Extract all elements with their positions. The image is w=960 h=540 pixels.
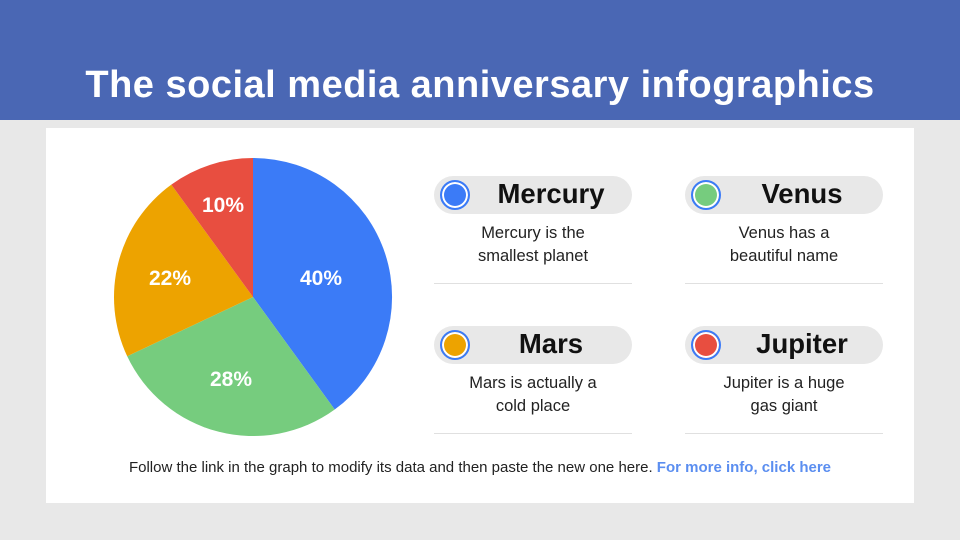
pie chart: 40% xyxy=(300,267,342,290)
legend: Mercury xyxy=(434,176,632,284)
legend: Mercury: Mercury is the xyxy=(481,224,585,242)
title: The social media anniversary infographics xyxy=(85,64,875,106)
pie chart: 22% xyxy=(149,267,191,290)
legend: Venus: beautiful name xyxy=(730,247,838,265)
legend: Venus: Venus xyxy=(761,178,842,209)
legend: Jupiter: Jupiter xyxy=(756,328,848,359)
legend: Mars: Mars is actually a xyxy=(469,374,597,392)
header bar xyxy=(0,0,960,120)
legend: Mars xyxy=(434,326,632,434)
legend: Mars: cold place xyxy=(496,397,570,415)
legend: Venus: Venus has a xyxy=(739,224,829,242)
pie chart: 10% xyxy=(202,194,244,217)
panel: content xyxy=(46,128,914,503)
legend: Jupiter: Jupiter is a huge xyxy=(723,374,845,392)
legend: Mercury: Mercury xyxy=(498,178,604,209)
footer note: Follow the link in the graph to modify its data and then paste the new one here. For more info, click here xyxy=(129,459,831,476)
legend: Jupiter: gas giant xyxy=(751,397,817,415)
legend: Mars: Mars xyxy=(519,328,583,359)
legend: Venus xyxy=(685,176,883,284)
legend: Jupiter xyxy=(685,326,883,434)
pie chart: 28% xyxy=(210,368,252,391)
legend: Mercury: smallest planet xyxy=(478,247,588,265)
